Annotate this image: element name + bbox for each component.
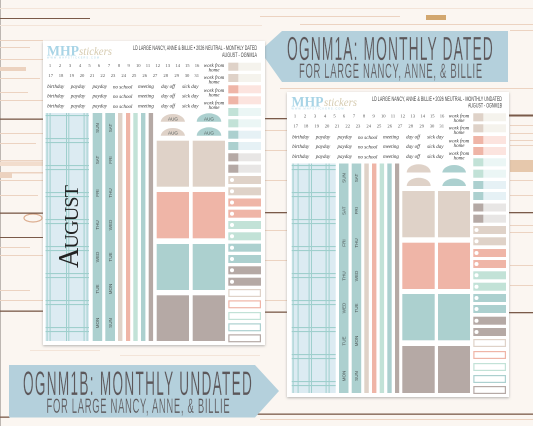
thin colour strips	[118, 113, 153, 341]
weekday strips: SUN	[354, 371, 359, 381]
logo: MHP	[292, 94, 324, 110]
event script stickers: meeting	[138, 95, 154, 100]
date numbers: 22	[345, 124, 351, 128]
weekday strips: THU	[108, 188, 113, 198]
date numbers: 2	[304, 114, 307, 118]
date numbers: 26	[387, 124, 393, 128]
event script stickers: sick day	[182, 95, 199, 100]
event script stickers: meeting	[383, 145, 399, 150]
event script stickers: payday	[91, 104, 108, 109]
date numbers: 19	[314, 124, 320, 128]
date numbers: 24	[121, 73, 127, 78]
event script stickers: home	[454, 156, 465, 162]
weekday strips: THU	[95, 220, 100, 230]
month domes: AUG	[204, 130, 214, 136]
event script stickers: sick day	[182, 85, 199, 90]
date numbers: 14	[175, 63, 181, 68]
date numbers: 11	[146, 63, 151, 68]
date numbers: 9	[373, 114, 376, 118]
date numbers	[48, 63, 200, 78]
sheet title: AUGUST - OGNM1B	[468, 102, 502, 110]
weekday strips: TUE	[95, 284, 100, 294]
event script stickers: no school	[358, 136, 378, 141]
weekday strips: WED	[342, 302, 347, 313]
logo	[292, 94, 357, 110]
event script stickers: no school	[113, 105, 133, 110]
event script stickers: sick day	[427, 136, 444, 140]
event script stickers: birthday	[292, 136, 310, 140]
sheet title	[372, 96, 502, 110]
large colour blocks	[157, 141, 225, 341]
weekday strips: MON	[95, 318, 100, 328]
banner: OGNM1B monthly undated: OGNM1B: MONTHLY UNDATED	[23, 366, 252, 403]
date numbers: 10	[136, 63, 141, 68]
weekday strips: FRI	[95, 189, 100, 197]
event script stickers: home	[454, 144, 465, 149]
event script stickers: payday	[336, 145, 353, 150]
weekday strips: MON	[108, 284, 113, 294]
side tabs	[473, 113, 506, 393]
date numbers: 19	[69, 73, 75, 78]
weekday strips: SUN	[95, 123, 100, 133]
date numbers: 27	[153, 73, 158, 78]
event script stickers: no school	[358, 155, 378, 160]
event script stickers: home	[209, 68, 220, 74]
weekday strips: MON	[354, 336, 359, 346]
event script stickers: no school	[358, 146, 378, 151]
date numbers: 15	[185, 63, 190, 68]
date numbers: 24	[366, 124, 372, 128]
weekday strips: MON	[342, 371, 347, 381]
date numbers: 1	[49, 63, 52, 68]
weekday strips: THU	[354, 238, 359, 248]
large colour blocks	[402, 191, 470, 393]
banner: OGNM1A monthly dated: FOR LARGE NANCY, ANNE, & BILLIE	[299, 60, 482, 83]
event script stickers: day off	[161, 85, 175, 90]
month domes: AUG	[168, 116, 178, 122]
date numbers: 27	[398, 124, 403, 128]
weekday strips: SAT	[95, 156, 100, 164]
month domes	[161, 113, 221, 136]
event script stickers: work from	[449, 114, 470, 120]
event script stickers: birthday	[47, 85, 65, 90]
date numbers: 3	[314, 114, 317, 118]
date numbers: 8	[363, 114, 366, 118]
date numbers: 13	[165, 63, 171, 68]
event script stickers: payday	[70, 104, 86, 109]
event script stickers: payday	[91, 85, 108, 90]
date numbers: 5	[333, 114, 336, 118]
date numbers: 4	[79, 63, 82, 68]
event script stickers: payday	[315, 145, 331, 150]
weekday strips: SUN	[108, 318, 113, 328]
date numbers: 7	[353, 114, 356, 118]
date numbers: 23	[111, 73, 116, 78]
date numbers: 21	[335, 124, 340, 128]
side tabs	[228, 63, 261, 342]
weekday strips: TUE	[354, 303, 359, 313]
event script stickers: birthday	[47, 104, 65, 109]
banner: OGNM1A monthly dated	[260, 31, 508, 83]
date numbers: 14	[420, 114, 426, 118]
weekday strips: SAT	[342, 206, 347, 215]
sticker sheet: dated	[43, 41, 265, 345]
sticker sheet: undated	[287, 92, 509, 397]
weekday strips: TUE	[108, 252, 113, 262]
weekday strips: FRI	[354, 207, 359, 214]
date numbers: 7	[108, 63, 111, 68]
event script stickers: work from	[449, 126, 470, 132]
date numbers: 12	[155, 63, 161, 68]
weekday strips: SUN	[342, 173, 347, 183]
date numbers: 23	[356, 124, 361, 128]
event script stickers: no school	[113, 95, 133, 100]
event script stickers: home	[209, 93, 220, 98]
date numbers: 16	[440, 114, 445, 118]
event script stickers: sick day	[427, 155, 444, 160]
date numbers: 4	[324, 114, 327, 118]
date numbers: 8	[118, 63, 121, 68]
logo: stickers	[324, 95, 357, 109]
date numbers: 5	[88, 63, 91, 68]
weekday strips: TUE	[342, 336, 347, 346]
event script stickers: work from	[204, 64, 225, 69]
weekday strips: THU	[342, 271, 347, 281]
event script stickers: payday	[70, 95, 86, 100]
sheet title: LD LARGE NANCY, ANNE & BILLIE • 2026 NEUTRAL - MONTHLY DATED	[133, 45, 257, 52]
event script stickers: birthday	[47, 95, 65, 100]
logo: WWW.MHPSTICKERS.COM	[292, 108, 344, 110]
date numbers: 6	[98, 63, 101, 68]
event script stickers: home	[209, 106, 220, 111]
date numbers: 20	[325, 124, 330, 128]
event script stickers: payday	[91, 95, 108, 100]
event script stickers: payday	[315, 155, 331, 160]
date numbers: 21	[90, 73, 95, 78]
weekday strips: WED	[108, 219, 113, 230]
event script stickers: sick day	[182, 104, 199, 109]
date numbers	[293, 114, 445, 128]
banner: OGNM1A monthly dated: OGNM1A: MONTHLY DATED	[287, 31, 493, 68]
event script stickers: home	[209, 81, 220, 86]
date numbers: 18	[304, 124, 309, 128]
event script stickers: day off	[406, 136, 420, 140]
date numbers: 11	[391, 114, 396, 118]
date numbers: 29	[419, 124, 425, 128]
date numbers: 1	[294, 114, 297, 118]
event script stickers: payday	[336, 136, 353, 140]
event script stickers: day off	[161, 104, 175, 109]
weekday strips: SAT	[108, 124, 113, 132]
event script stickers: work from	[449, 140, 470, 144]
weekday strips: WED	[354, 270, 359, 281]
date numbers: 28	[408, 124, 414, 128]
sheet title	[133, 45, 257, 59]
event script stickers: meeting	[383, 155, 399, 160]
banner: OGNM1B monthly undated: FOR LARGE NANCY, ANNE, & BILLIE	[46, 395, 230, 418]
date numbers: 28	[163, 73, 169, 78]
date numbers: 29	[174, 73, 180, 78]
event script stickers: meeting	[383, 136, 399, 140]
event script stickers: meeting	[138, 104, 154, 109]
event script stickers: day off	[406, 155, 420, 160]
date numbers: 17	[48, 73, 54, 78]
date numbers: 25	[132, 73, 137, 78]
date numbers: 31	[194, 73, 200, 78]
month name: AUGUST	[54, 185, 85, 268]
logo: MHP	[47, 44, 79, 60]
date numbers: 18	[59, 73, 64, 78]
weekday strips: FRI	[342, 239, 347, 247]
event script stickers: birthday	[292, 145, 310, 150]
event script stickers: payday	[315, 136, 331, 140]
weekday strips: FRI	[108, 156, 113, 164]
event script stickers: work from	[204, 102, 225, 107]
date numbers: 16	[195, 63, 200, 68]
event script stickers: no school	[113, 86, 133, 90]
month domes: AUG	[204, 116, 214, 122]
date numbers: 25	[377, 124, 382, 128]
date numbers: 30	[185, 73, 190, 78]
weekday strips	[339, 164, 361, 393]
logo	[47, 44, 112, 60]
date numbers: 15	[430, 114, 435, 118]
date numbers: 31	[439, 124, 445, 128]
date numbers: 3	[69, 63, 72, 68]
date numbers: 12	[400, 114, 406, 118]
date numbers: 30	[430, 124, 435, 128]
month domes: AUG	[168, 130, 178, 136]
date numbers: 9	[128, 63, 131, 68]
plaid month panel	[292, 164, 336, 393]
event script stickers: work from	[204, 89, 225, 94]
event script stickers: sick day	[427, 145, 444, 150]
date numbers: 2	[59, 63, 62, 68]
plaid month panel	[46, 113, 89, 341]
event script stickers: day off	[406, 145, 420, 150]
event script stickers: work from	[449, 152, 470, 157]
event script stickers: home	[454, 119, 465, 124]
event script stickers: payday	[70, 85, 86, 90]
date numbers: 10	[381, 114, 386, 118]
weekday strips: WED	[95, 251, 100, 262]
date numbers: 22	[100, 73, 106, 78]
weekday strips: SAT	[354, 174, 359, 182]
thin colour strips	[364, 164, 399, 393]
blank domes	[407, 164, 466, 186]
date numbers: 26	[142, 73, 148, 78]
date numbers: 20	[80, 73, 85, 78]
banner: OGNM1B monthly undated	[9, 365, 279, 418]
event script stickers: home	[454, 131, 465, 136]
event script stickers: day off	[161, 95, 175, 100]
event script stickers: meeting	[138, 85, 154, 90]
date numbers: 17	[293, 124, 299, 128]
event script stickers: payday	[336, 155, 353, 160]
event script stickers: work from	[204, 76, 225, 81]
event script stickers: birthday	[292, 155, 310, 160]
event script stickers	[292, 114, 470, 162]
weekday strips	[93, 113, 115, 341]
sheet title: AUGUST - OGNM1A	[222, 52, 257, 59]
logo: stickers	[79, 44, 112, 58]
logo: WWW.MHPSTICKERS.COM	[47, 56, 99, 60]
date numbers: 13	[410, 114, 416, 118]
event script stickers	[47, 64, 225, 111]
date numbers: 6	[343, 114, 346, 118]
